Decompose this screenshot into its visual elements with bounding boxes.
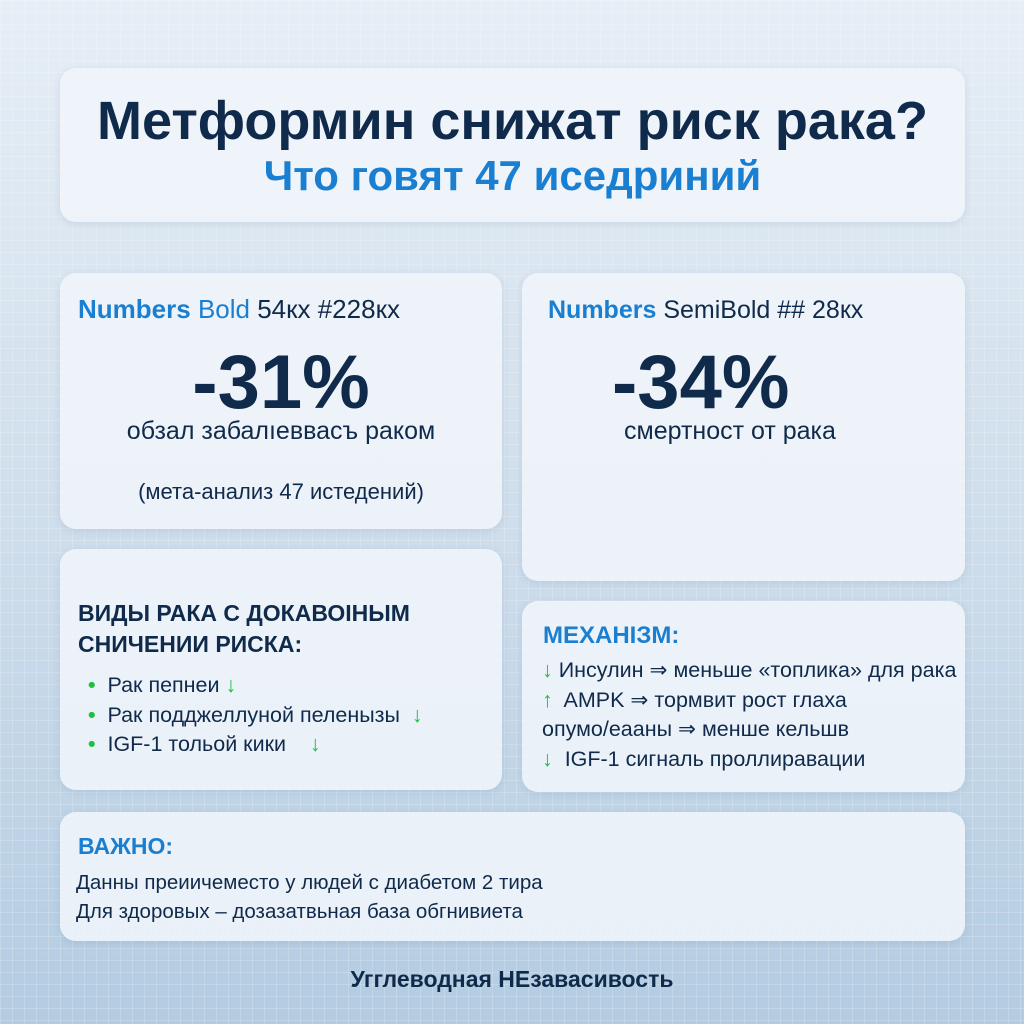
note text: Данны преиичеместо у людей с диабетом 2 тира: [76, 871, 543, 894]
note: (мета-анализ 47 истедений): [138, 479, 424, 504]
mechanism list: опумо/еааны ⇒ менше кельшв: [542, 717, 849, 741]
heading: МЕХАНІЗМ:: [543, 622, 679, 649]
panel header: Numbers SemiBold ## 28кх: [548, 296, 863, 324]
mechanism list: [542, 658, 956, 770]
panel: mortality stat: [522, 273, 965, 581]
bullet list: • IGF-1 тольой кики ↓: [88, 732, 321, 756]
note text: [76, 871, 543, 923]
big number: -34%: [612, 340, 789, 425]
bullet list: • Рак подджеллуной пеленызы ↓: [88, 702, 423, 726]
title panel: [60, 68, 965, 222]
mechanism list: ↓ Инсулин ⇒ меньше «топлика» для рака: [542, 658, 956, 682]
panel header: Numbers Bold 54кх #228кх: [78, 294, 400, 324]
mechanism list: ↑ AMPK ⇒ тормвит рост глаха: [542, 688, 847, 712]
panel: cancer types: [60, 549, 502, 790]
heading: СНИЧЕНИИ РИСКА:: [78, 631, 302, 657]
title: Метформин снижат риск рака?: [97, 91, 928, 151]
subtitle: Что говят 47 иседриний: [264, 152, 761, 199]
heading: ВАЖНО:: [78, 833, 173, 859]
big number: -31%: [192, 340, 370, 425]
heading: ВИДЫ РАКА С ДОКАВОІНЫМ: [78, 600, 410, 626]
mechanism list: ↓ IGF-1 сигналь проллиравации: [542, 746, 865, 770]
bullet list: • Рак пепнеи ↓: [88, 673, 236, 697]
caption: смертност от рака: [624, 417, 836, 445]
bullet list: [88, 673, 423, 756]
note text: Для здоровых – дозазатвьная база обгнивиета: [76, 900, 523, 923]
panel: incidence stat: [60, 273, 502, 529]
panel: mechanism: [522, 601, 965, 792]
caption: обзал забалıеввасъ раком: [127, 417, 435, 445]
heading: [78, 600, 410, 657]
panel: important note: [60, 812, 965, 941]
footer: Угглеводная НЕзавасивость: [350, 966, 674, 992]
